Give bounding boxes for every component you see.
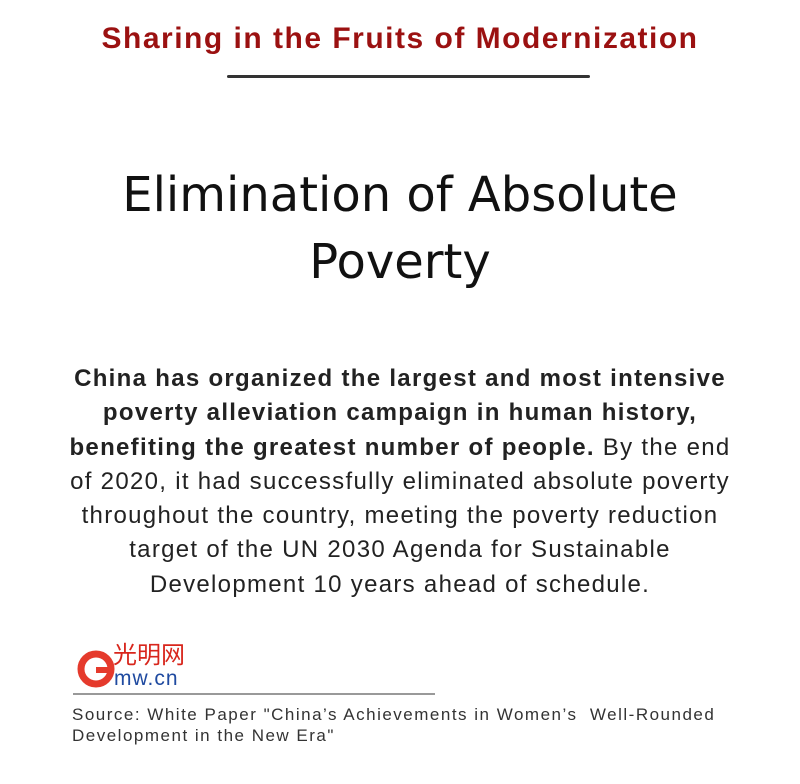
body text: throughout the country, meeting the poverty reduction [82, 502, 718, 529]
body text: benefiting the greatest number of people. By the end [69, 434, 731, 461]
body text: of 2020, it had successfully eliminated absolute poverty [70, 468, 730, 495]
logo: gmw.cn: mw.cn [114, 667, 179, 690]
logo: gmw.cn [78, 636, 185, 690]
header title: Sharing in the Fruits of Modernization [102, 22, 698, 55]
main heading [122, 167, 678, 290]
body text: Development 10 years ahead of schedule. [150, 571, 650, 598]
source text: Source: White Paper "China’s Achievements in Women’s Well-Rounded [72, 705, 715, 724]
body text: poverty alleviation campaign in human history, [103, 399, 697, 426]
main heading: Elimination of Absolute [122, 167, 678, 223]
body text [69, 365, 731, 598]
logo: gmw.cn: 光明网 [113, 636, 185, 670]
source text [72, 705, 715, 745]
body text: China has organized the largest and most intensive [74, 365, 726, 392]
body text: target of the UN 2030 Agenda for Sustainable [129, 536, 671, 563]
main heading: Poverty [309, 234, 491, 290]
source text: Development in the New Era" [72, 726, 335, 745]
